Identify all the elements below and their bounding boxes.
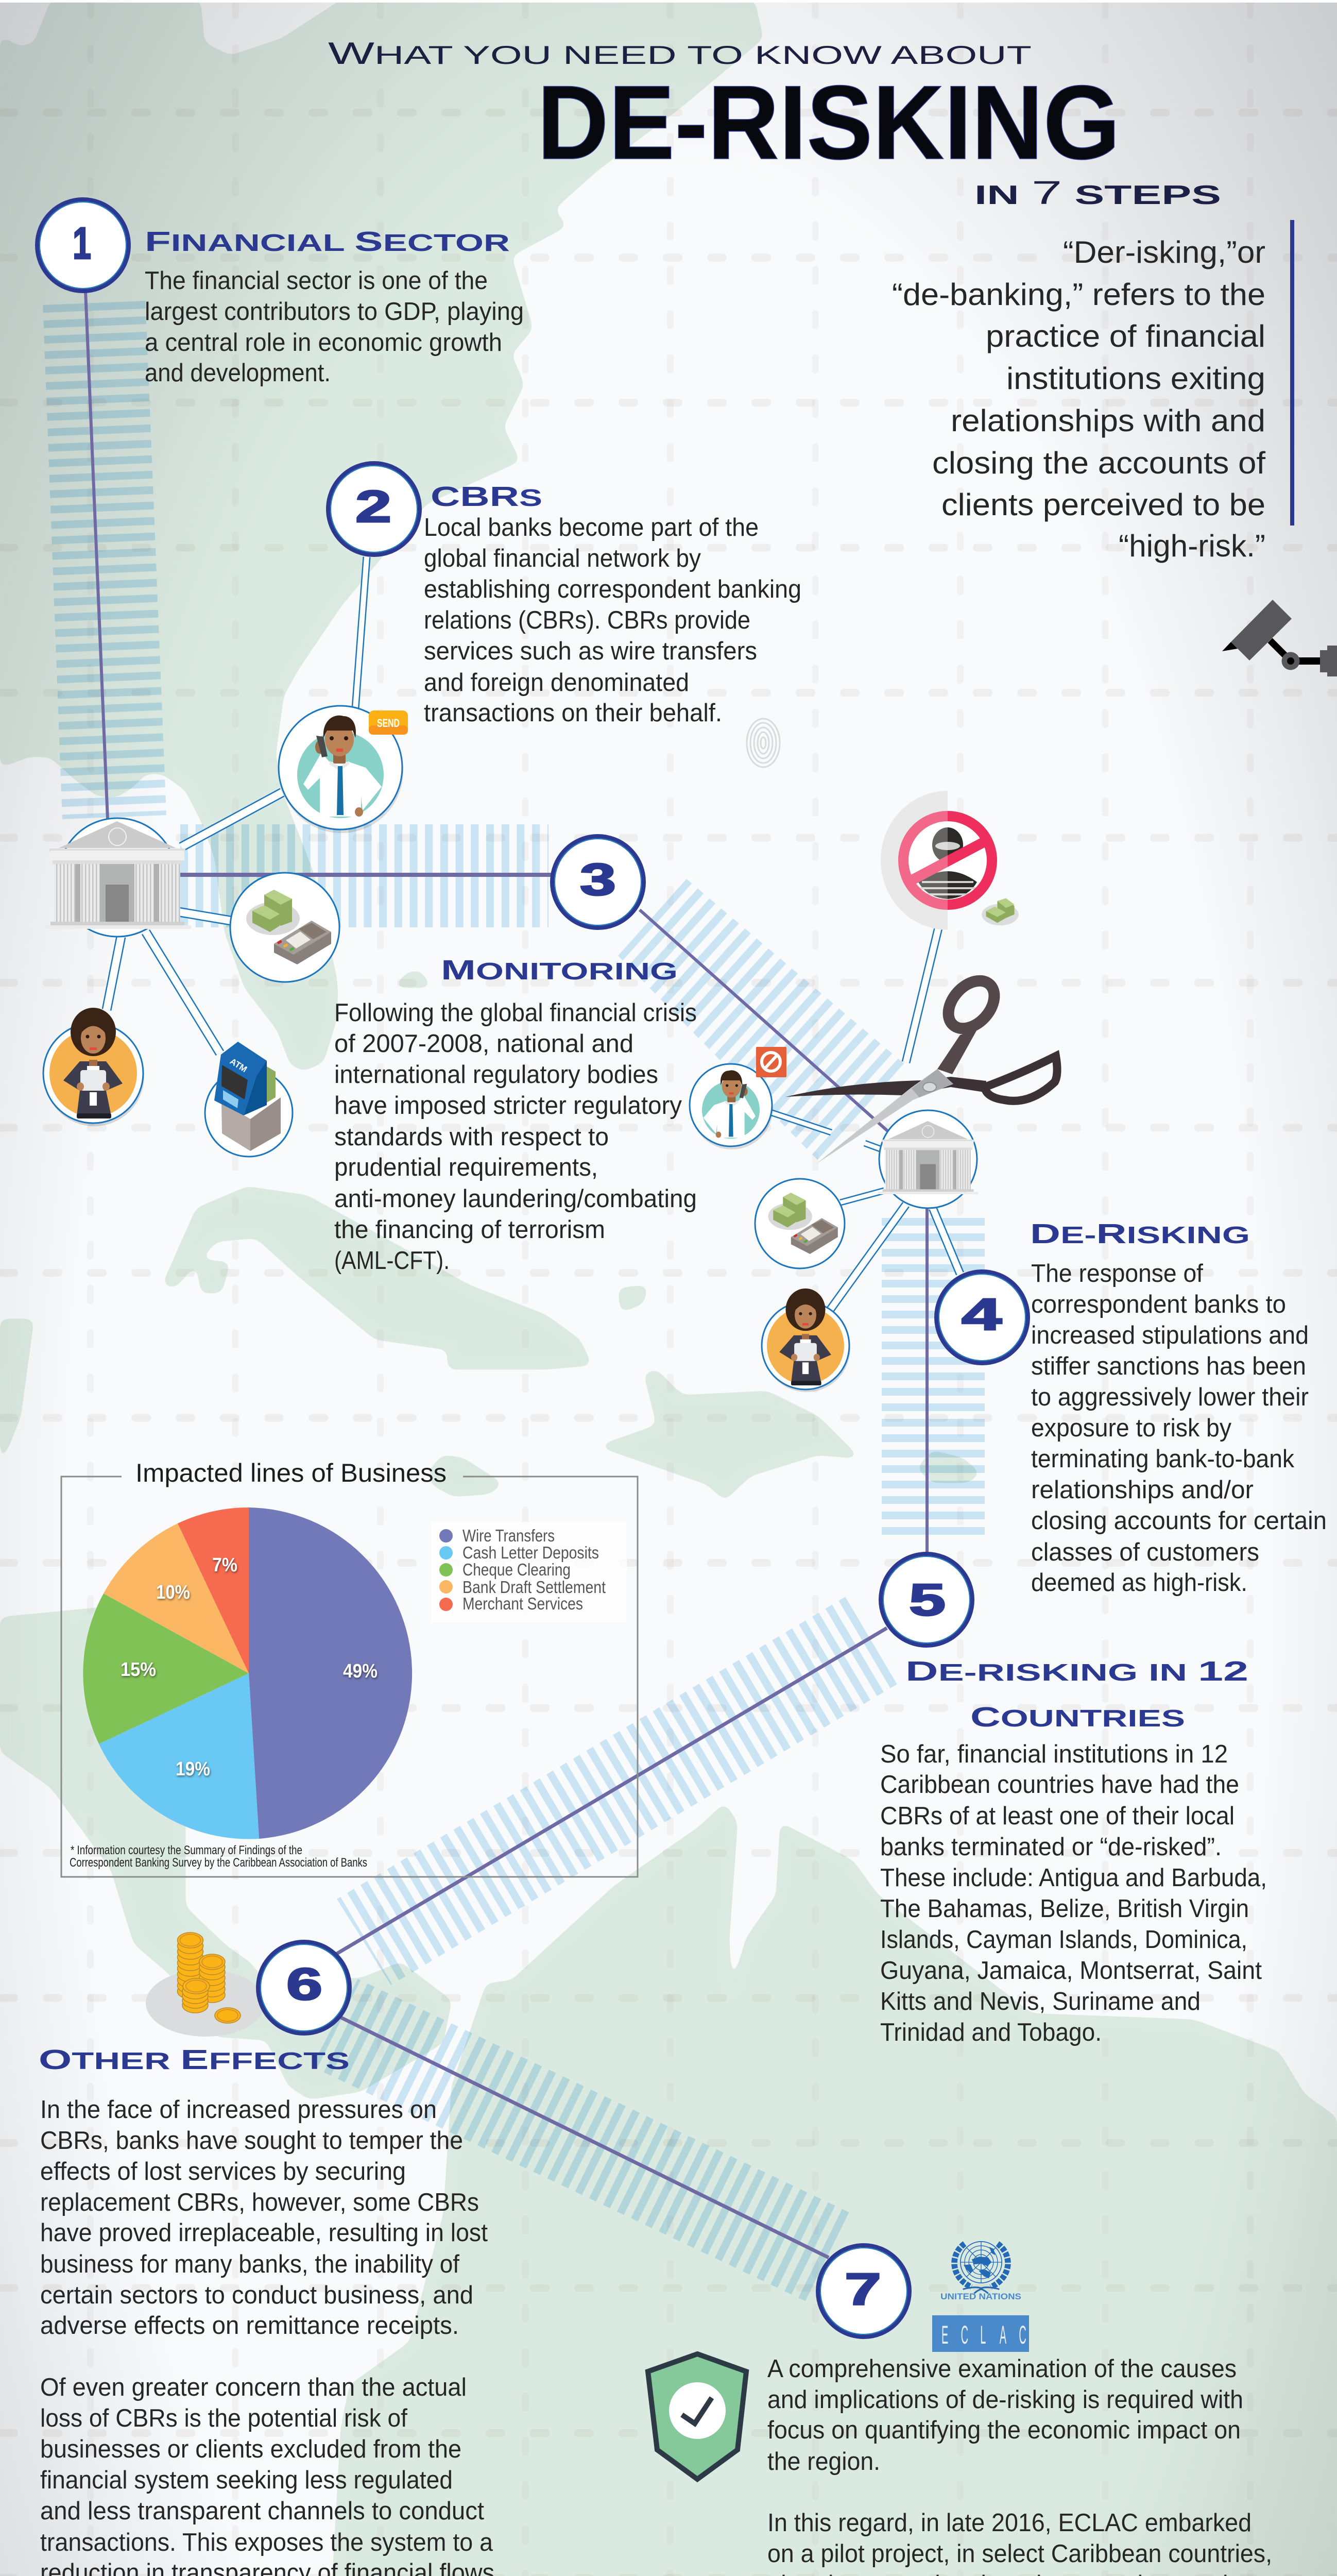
legend: Cash Letter Deposits — [462, 1543, 599, 1562]
body text: of 2007-2008, national and — [334, 1030, 633, 1058]
body text: international regulatory bodies — [334, 1061, 658, 1089]
body text: CBRs of at least one of their local — [880, 1802, 1235, 1830]
number badge 4: 4 — [962, 1290, 1002, 1340]
body text: loss of CBRs is the potential risk of — [40, 2404, 407, 2432]
number badge 1 — [37, 199, 129, 291]
body text: Trinidad and Tobago. — [880, 2019, 1102, 2046]
heading: CBR S — [431, 481, 542, 512]
body text: relationships and/or — [1031, 1476, 1254, 1504]
step 1: financial sector — [37, 199, 524, 387]
logo: United Nations small — [940, 2242, 1021, 2301]
quote: definition of de-risking: “high-risk.” — [1119, 529, 1265, 563]
number badge 1: 1 — [73, 218, 91, 268]
body text: transactions on their behalf. — [424, 699, 722, 727]
body text: effects of lost services by securing — [40, 2158, 406, 2185]
quote: definition of de-risking — [892, 220, 1294, 563]
body text: Guyana, Jamaica, Montserrat, Saint — [880, 1957, 1262, 1985]
body text: and less transparent channels to conduct — [40, 2497, 484, 2525]
body text: transactions. This exposes the system to a — [40, 2529, 493, 2556]
body text: relations (CBRs). CBRs provide — [424, 606, 750, 634]
quote: definition of de-risking: “Der-isking,”or — [1063, 235, 1265, 269]
icon: send badge: SEND — [377, 717, 400, 730]
pie labels: 15% — [121, 1659, 156, 1681]
number badge 2 — [328, 463, 420, 555]
body text — [40, 2096, 494, 2576]
body text: closing accounts for certain — [1031, 1507, 1327, 1535]
body text — [334, 999, 697, 1275]
footnote — [70, 1843, 367, 1870]
pie labels: 49% — [343, 1660, 378, 1682]
icon: money and card terminal — [755, 1179, 845, 1268]
icon: security camera — [1222, 600, 1337, 676]
body text: These include: Antigua and Barbuda, — [880, 1864, 1267, 1892]
step 7: way forward — [648, 2242, 1272, 2576]
title: IN 7 STEPS — [974, 174, 1221, 211]
body text: business for many banks, the inability of — [40, 2250, 459, 2278]
pie slices — [83, 1507, 412, 1839]
body text: financial system seeking less regulated — [40, 2466, 453, 2494]
connector lines between steps — [85, 291, 927, 2258]
body text: on a pilot project, in select Caribbean countries, — [767, 2540, 1272, 2568]
number badge 4 — [936, 1272, 1028, 1363]
number badge 5: 5 — [909, 1575, 946, 1625]
body text: Kitts and Nevis, Suriname and — [880, 1988, 1201, 2015]
heading: M ONITORING — [441, 955, 678, 986]
body text: Islands, Cayman Islands, Dominica, — [880, 1926, 1247, 1954]
body text: The Bahamas, Belize, British Virgin — [880, 1895, 1249, 1923]
body text: replacement CBRs, however, some CBRs — [40, 2189, 479, 2216]
number badge 6: 6 — [286, 1959, 322, 2009]
body text: (AML-CFT). — [334, 1247, 450, 1275]
icon: banker on phone, mirrored — [690, 1064, 773, 1149]
body text: In the face of increased pressures on — [40, 2096, 437, 2124]
title — [328, 36, 1221, 211]
body text: Local banks become part of the — [424, 514, 759, 541]
body text — [424, 514, 801, 727]
icon: businesswoman with tablet — [762, 1289, 850, 1392]
icon: ATM: ATM — [228, 1056, 249, 1074]
body text: the financing of terrorism — [334, 1216, 605, 1244]
body text: Following the global financial crisis — [334, 999, 697, 1027]
icon: ATM — [205, 1042, 293, 1157]
body text: establishing correspondent banking — [424, 575, 801, 603]
logo: United Nations small: UNITED NATIONS — [940, 2292, 1021, 2301]
body text: deemed as high-risk. — [1031, 1569, 1247, 1597]
number badge 3: 3 — [580, 855, 616, 905]
icon: money and card terminal — [230, 873, 339, 982]
icon: no thieves sign — [881, 791, 994, 930]
body text: The response of — [1031, 1260, 1203, 1287]
body text: and development. — [145, 359, 331, 387]
legend: Bank Draft Settlement — [462, 1578, 606, 1597]
pie labels — [121, 1554, 378, 1780]
footnote: * Information courtesy the Summary of Findings of the — [71, 1843, 302, 1857]
heading: D E-RISKING IN 12 — [905, 1656, 1248, 1687]
body text — [1031, 1260, 1327, 1597]
body text: a central role in economic growth — [145, 329, 502, 357]
body text: exposure to risk by — [1031, 1414, 1231, 1442]
chart frame — [61, 1477, 638, 1877]
body text — [880, 1740, 1267, 2046]
body text: classes of customers — [1031, 1538, 1259, 1566]
heading: F INANCIAL S ECTOR — [145, 226, 510, 257]
network: local bank and services — [43, 557, 408, 1157]
icon: shield with check mark — [648, 2354, 746, 2479]
icon: scissors — [785, 972, 1057, 1164]
pie labels: 10% — [156, 1582, 190, 1603]
quote: definition of de-risking: closing the accounts of — [932, 446, 1265, 480]
heading: C OUNTRIES — [970, 1702, 1185, 1733]
step 3: monitoring — [334, 836, 697, 1275]
body text: the region. — [767, 2448, 880, 2476]
body text: services such as wire transfers — [424, 637, 757, 665]
legend: Cheque Clearing — [462, 1560, 571, 1579]
logo: ECLAC small — [932, 2315, 1029, 2352]
body text: adverse effects on remittance receipts. — [40, 2312, 459, 2340]
step 6: other effects — [39, 1933, 494, 2576]
chart title: Impacted lines of Business — [135, 1459, 447, 1487]
quote: definition of de-risking: institutions exiting — [1006, 361, 1265, 396]
number badge 3 — [552, 836, 644, 928]
step 2: CBRs — [328, 463, 801, 727]
link lines — [107, 557, 367, 1053]
body text: increased stipulations and — [1031, 1321, 1309, 1349]
body text: stiffer sanctions has been — [1031, 1352, 1306, 1380]
body text: Caribbean countries have had the — [880, 1771, 1239, 1799]
icon: send badge — [369, 710, 408, 735]
number badge 5 — [881, 1554, 972, 1646]
quote: definition of de-risking: relationships with and — [951, 403, 1265, 438]
body text: have imposed stricter regulatory — [334, 1092, 682, 1120]
body text: to aggressively lower their — [1031, 1383, 1309, 1411]
body text: The financial sector is one of the — [145, 267, 488, 295]
step 4: de-risking — [936, 1218, 1327, 1597]
icon: prohibited badge — [756, 1047, 786, 1077]
number badge 7: 7 — [845, 2264, 881, 2314]
pie labels: 7% — [212, 1554, 237, 1576]
body text: largest contributors to GDP, playing — [145, 298, 524, 326]
step 5: de-risking in 12 countries — [880, 1554, 1267, 2046]
body text: and foreign denominated — [424, 669, 689, 697]
number badge 6 — [258, 1942, 350, 2033]
heading: O THER E FFECTS — [39, 2044, 350, 2075]
icon: fingerprint — [747, 719, 780, 767]
title: DE-RISKING — [537, 64, 1120, 181]
panel: impacted lines of business pie chart — [61, 1459, 638, 1877]
body text: standards with respect to — [334, 1123, 609, 1151]
heading: D E- R ISKING — [1030, 1218, 1250, 1249]
hatched connector bands — [43, 296, 985, 2301]
link lines — [770, 909, 960, 1310]
body text: In this regard, in late 2016, ECLAC embarked — [767, 2509, 1252, 2537]
body text: global financial network by — [424, 545, 701, 572]
number badge 2: 2 — [355, 482, 391, 532]
body text: correspondent banks to — [1031, 1291, 1286, 1318]
icon: bank with clients cut — [878, 1110, 978, 1208]
body text: terminating bank-to-bank — [1031, 1445, 1294, 1473]
legend: Wire Transfers — [462, 1526, 555, 1545]
body text: anti-money laundering/combating — [334, 1185, 697, 1213]
body text: have proved irreplaceable, resulting in lost — [40, 2219, 488, 2247]
icon: coin stacks — [146, 1933, 265, 2037]
body text: and implications of de-risking is required with — [767, 2386, 1243, 2414]
legend: Merchant Services — [462, 1594, 583, 1613]
body text: prudential requirements, — [334, 1154, 598, 1181]
body text: So far, financial institutions in 12 — [880, 1740, 1228, 1768]
icon: banker on phone — [279, 706, 403, 833]
body text: certain sectors to conduct business, and — [40, 2281, 473, 2309]
footnote: Correspondent Banking Survey by the Caribbean Association of Banks — [70, 1856, 367, 1870]
pie labels: 19% — [176, 1758, 210, 1780]
icon: businesswoman with tablet — [43, 1008, 144, 1126]
title: W HAT YOU NEED TO KNOW ABOUT — [328, 36, 1032, 71]
heading — [905, 1656, 1248, 1733]
quote: definition of de-risking: clients perceived to be — [941, 487, 1265, 522]
body text — [767, 2355, 1272, 2576]
body text: A comprehensive examination of the causes — [767, 2355, 1237, 2383]
number badge 7 — [818, 2245, 910, 2337]
icon: bank — [44, 818, 191, 937]
body text: Of even greater concern than the actual — [40, 2374, 467, 2401]
body text: businesses or clients excluded from the — [40, 2435, 461, 2463]
body text: focus on quantifying the economic impact on — [767, 2416, 1241, 2444]
quote: definition of de-risking: “de-banking,” refers to the — [892, 277, 1265, 312]
body text: banks terminated or “de-risked”. — [880, 1833, 1222, 1861]
quote: definition of de-risking: practice of financial — [986, 319, 1265, 353]
network: bank being cut off — [690, 791, 1057, 1392]
logo: ECLAC small: ECLAC — [941, 2321, 1026, 2350]
icon: small money stack — [982, 898, 1019, 925]
body text: CBRs, banks have sought to temper the — [40, 2127, 463, 2155]
legend — [432, 1522, 627, 1622]
body text — [145, 267, 524, 387]
